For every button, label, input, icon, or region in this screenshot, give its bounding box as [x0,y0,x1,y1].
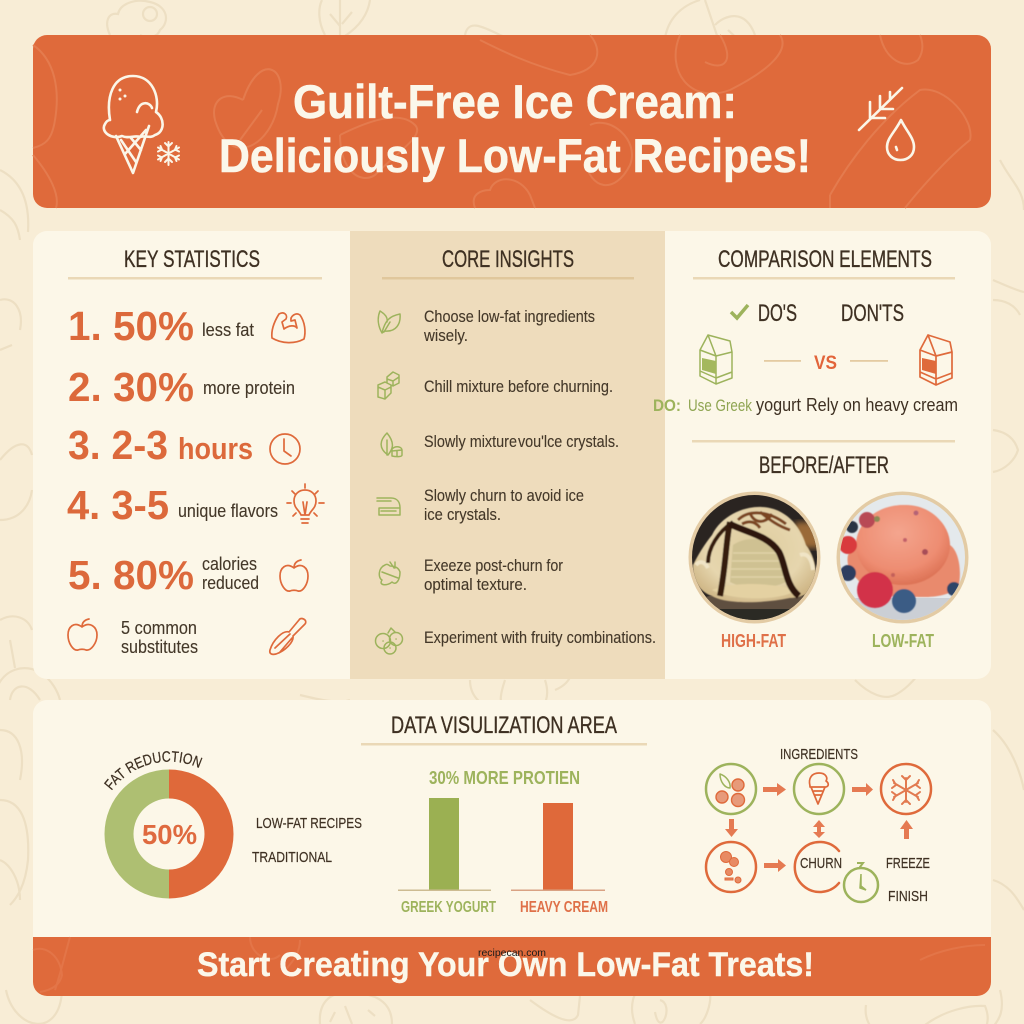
icon: green milk carton [700,335,732,384]
insight 5 [379,557,563,594]
insight 6: Experiment with fruity combinations. [424,629,656,647]
do and don't line: Rely on heavy cream [806,395,958,415]
stat 2 [68,364,295,410]
stat 2: more protein [203,378,295,398]
stat 3 [68,422,300,468]
insight 5: optimal texture. [424,576,527,594]
step: churn [795,842,842,892]
heading: before/after: BEFORE/AFTER [759,452,889,479]
substitutes row: 5 common [121,618,197,638]
do's and don'ts headers: DON'TS [841,300,904,327]
footer doodles [33,937,985,992]
heading: core insights: CORE INSIGHTS [442,246,574,273]
insight 4: ice crystals. [424,506,501,524]
watermark: recipecan.com [478,947,546,959]
flow labels [886,855,930,905]
title: Deliciously Low-Fat Recipes! [219,129,811,182]
insight 1 [378,308,595,345]
photo: high-fat ice cream [688,492,821,627]
label: low-fat: LOW-FAT [872,631,934,651]
vs divider: VS [814,353,837,374]
stat 5: 5. 80% [68,552,194,598]
donut legend [252,815,362,866]
insight 1: wisely. [423,327,468,345]
heading: comparison elements: COMPARISON ELEMENTS [718,246,932,273]
bar chart: GREEK YOGURT [401,899,496,916]
do and don't line: DO: [653,396,681,415]
stat 1: less fat [202,320,254,340]
heading: data visualization area: DATA VISULIZATION AREA [391,712,617,739]
stat 3: 3. 2-3 [68,422,168,468]
do's and don'ts headers [731,300,904,327]
label: high-fat: HIGH-FAT [721,631,786,651]
insight 2: Chill mixture before churning. [424,378,613,396]
icon: timer [844,863,878,902]
icon: snowflake [158,142,179,165]
donut legend: LOW-FAT RECIPES [256,815,362,832]
do and don't line [653,395,958,415]
do and don't line: yogurt [756,395,801,415]
stat 2: 2. 30% [68,364,194,410]
stat 4: 4. 3-5 [67,482,169,528]
vs divider [764,353,888,374]
donut legend: TRADITIONAL [252,849,332,866]
banner [33,35,991,208]
stat 5: calories [202,554,257,574]
heading: key statistics: KEY STATISTICS [124,246,260,273]
stat 3: hours [178,431,253,466]
insight 5: Exeeze post-churn for [424,557,563,575]
panel: core insights [350,231,665,679]
insight 3: Slowly mixture [424,433,517,451]
flow labels: FREEZE [886,855,930,872]
panel: data visualization [33,700,991,937]
donut chart [104,751,234,898]
title [219,75,811,182]
insight 6 [376,628,656,654]
insight 3: vou'lce crystals. [518,433,619,451]
call to action: Start Creating Your Own Low-Fat Treats! [197,946,814,984]
step: ice cream circle [794,764,844,814]
panel: comparison elements [653,231,991,679]
bar chart: HEAVY CREAM [520,899,608,916]
insight 3 [381,433,619,457]
icon: ice cream cone [104,76,163,173]
insight 2 [378,372,613,399]
process flow diagram: INGREDIENTS [780,746,858,763]
banner doodles [33,35,971,208]
stat 5 [68,552,308,598]
insight 4 [377,487,584,524]
bar chart: 30% MORE PROTIEN [429,767,580,788]
do and don't line: Use Greek [688,396,752,415]
step: churn: CHURN [800,855,842,872]
bar chart [398,767,608,916]
title: Guilt-Free Ice Cream: [293,75,737,128]
step: freeze circle [881,764,931,814]
footer banner [33,937,991,996]
step: prep circle [706,842,756,892]
donut chart: FAT REDUCTION [104,751,202,790]
insight 4: Slowly churn to avoid ice [424,487,584,505]
icon: red milk carton [920,335,952,385]
stat 4 [67,482,324,528]
photo: low-fat ice cream [836,492,968,626]
stat 4: unique flavors [178,501,278,521]
step: ingredients circle [706,764,756,814]
process flow diagram [706,746,931,905]
donut chart: 50% [142,819,197,850]
stat 1 [68,303,305,349]
substitutes row [68,618,306,657]
flow labels: FINISH [888,888,928,905]
panel: key statistics [33,231,363,679]
icon: herb sprig and droplet [859,88,914,160]
flow arrows [725,783,913,872]
insight 1: Choose low-fat ingredients [424,308,595,326]
stat 5: reduced [202,573,259,593]
do's and don'ts headers: DO'S [758,300,797,327]
stat 1: 1. 50% [68,303,194,349]
substitutes row: substitutes [121,637,198,657]
